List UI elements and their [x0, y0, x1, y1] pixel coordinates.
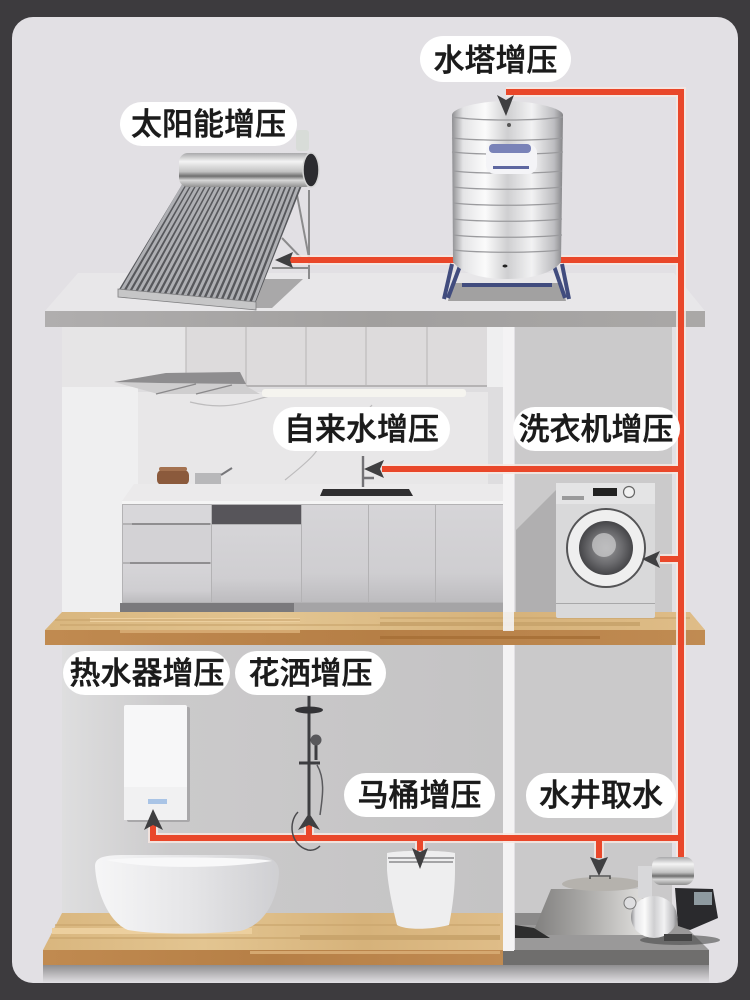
tower legs	[444, 264, 569, 299]
riser	[638, 866, 652, 898]
shower set	[292, 696, 323, 850]
arrow: to faucet	[364, 460, 384, 478]
water heater	[124, 705, 190, 822]
booster pump	[624, 857, 720, 945]
heater stand	[245, 190, 309, 308]
tank logo	[486, 144, 537, 174]
label: shower	[235, 651, 386, 695]
label: tap water: 自来水增压	[284, 412, 439, 447]
solar water heater	[118, 130, 319, 310]
bathroom wall	[62, 645, 503, 915]
kitchen room	[62, 327, 503, 618]
tank body	[452, 101, 563, 279]
sink	[320, 489, 413, 496]
base cabinets	[120, 504, 503, 618]
label: well: 水井取水	[539, 778, 663, 813]
controller	[675, 888, 718, 930]
arrow: to water tower	[497, 95, 514, 116]
faucet	[363, 456, 374, 487]
divider lower section	[503, 645, 514, 965]
arrow: to water heater	[144, 809, 163, 830]
vacuum tube panel	[118, 183, 303, 304]
pump base	[664, 934, 692, 941]
arrow: to toilet	[412, 848, 428, 869]
label: solar: 太阳能增压	[131, 107, 286, 142]
under cabinet light	[262, 389, 466, 397]
lower wooden floor	[43, 913, 503, 965]
red pipes	[153, 92, 681, 858]
pipe glow	[153, 92, 681, 858]
label: shower: 花洒增压	[248, 656, 372, 691]
tank ribs	[452, 117, 563, 252]
bathtub	[95, 855, 279, 934]
well room wall	[515, 645, 672, 915]
arrow: to shower	[298, 813, 320, 830]
roof platform	[45, 273, 705, 327]
kitchen wall	[62, 327, 503, 612]
label: tap water	[273, 407, 450, 451]
label: well	[526, 773, 676, 818]
floor shadow	[43, 965, 709, 983]
cookware and stove	[138, 467, 238, 494]
panel base rail	[118, 289, 256, 310]
tower shadow	[448, 283, 566, 301]
storage tank	[179, 130, 319, 187]
stone well	[515, 876, 648, 938]
washing machine	[516, 483, 655, 618]
water tower	[444, 101, 569, 301]
label: water tower	[420, 36, 571, 82]
middle wooden floor	[45, 612, 705, 645]
upper cabinets	[186, 327, 487, 387]
label: solar	[120, 102, 297, 146]
pressure tank	[652, 857, 694, 885]
toilet	[387, 851, 455, 929]
label: washing machine: 洗衣机增压	[518, 412, 674, 447]
arrow: to solar heater	[275, 252, 293, 268]
marble backsplash	[138, 392, 488, 484]
label: toilet	[344, 773, 495, 817]
pipe network	[153, 92, 681, 858]
arrow: to washing machine	[642, 551, 660, 568]
arrow: to well	[590, 857, 608, 876]
stone floor	[503, 913, 709, 965]
pump shadow	[640, 935, 720, 945]
white wall divider	[503, 327, 514, 965]
laundry room wall	[515, 327, 672, 613]
label: water heater: 热水器增压	[70, 656, 224, 691]
label: toilet: 马桶增压	[358, 778, 482, 813]
range hood	[114, 372, 260, 394]
countertop	[122, 484, 503, 504]
pump body	[631, 896, 677, 938]
label: water tower: 水塔增压	[434, 43, 558, 78]
